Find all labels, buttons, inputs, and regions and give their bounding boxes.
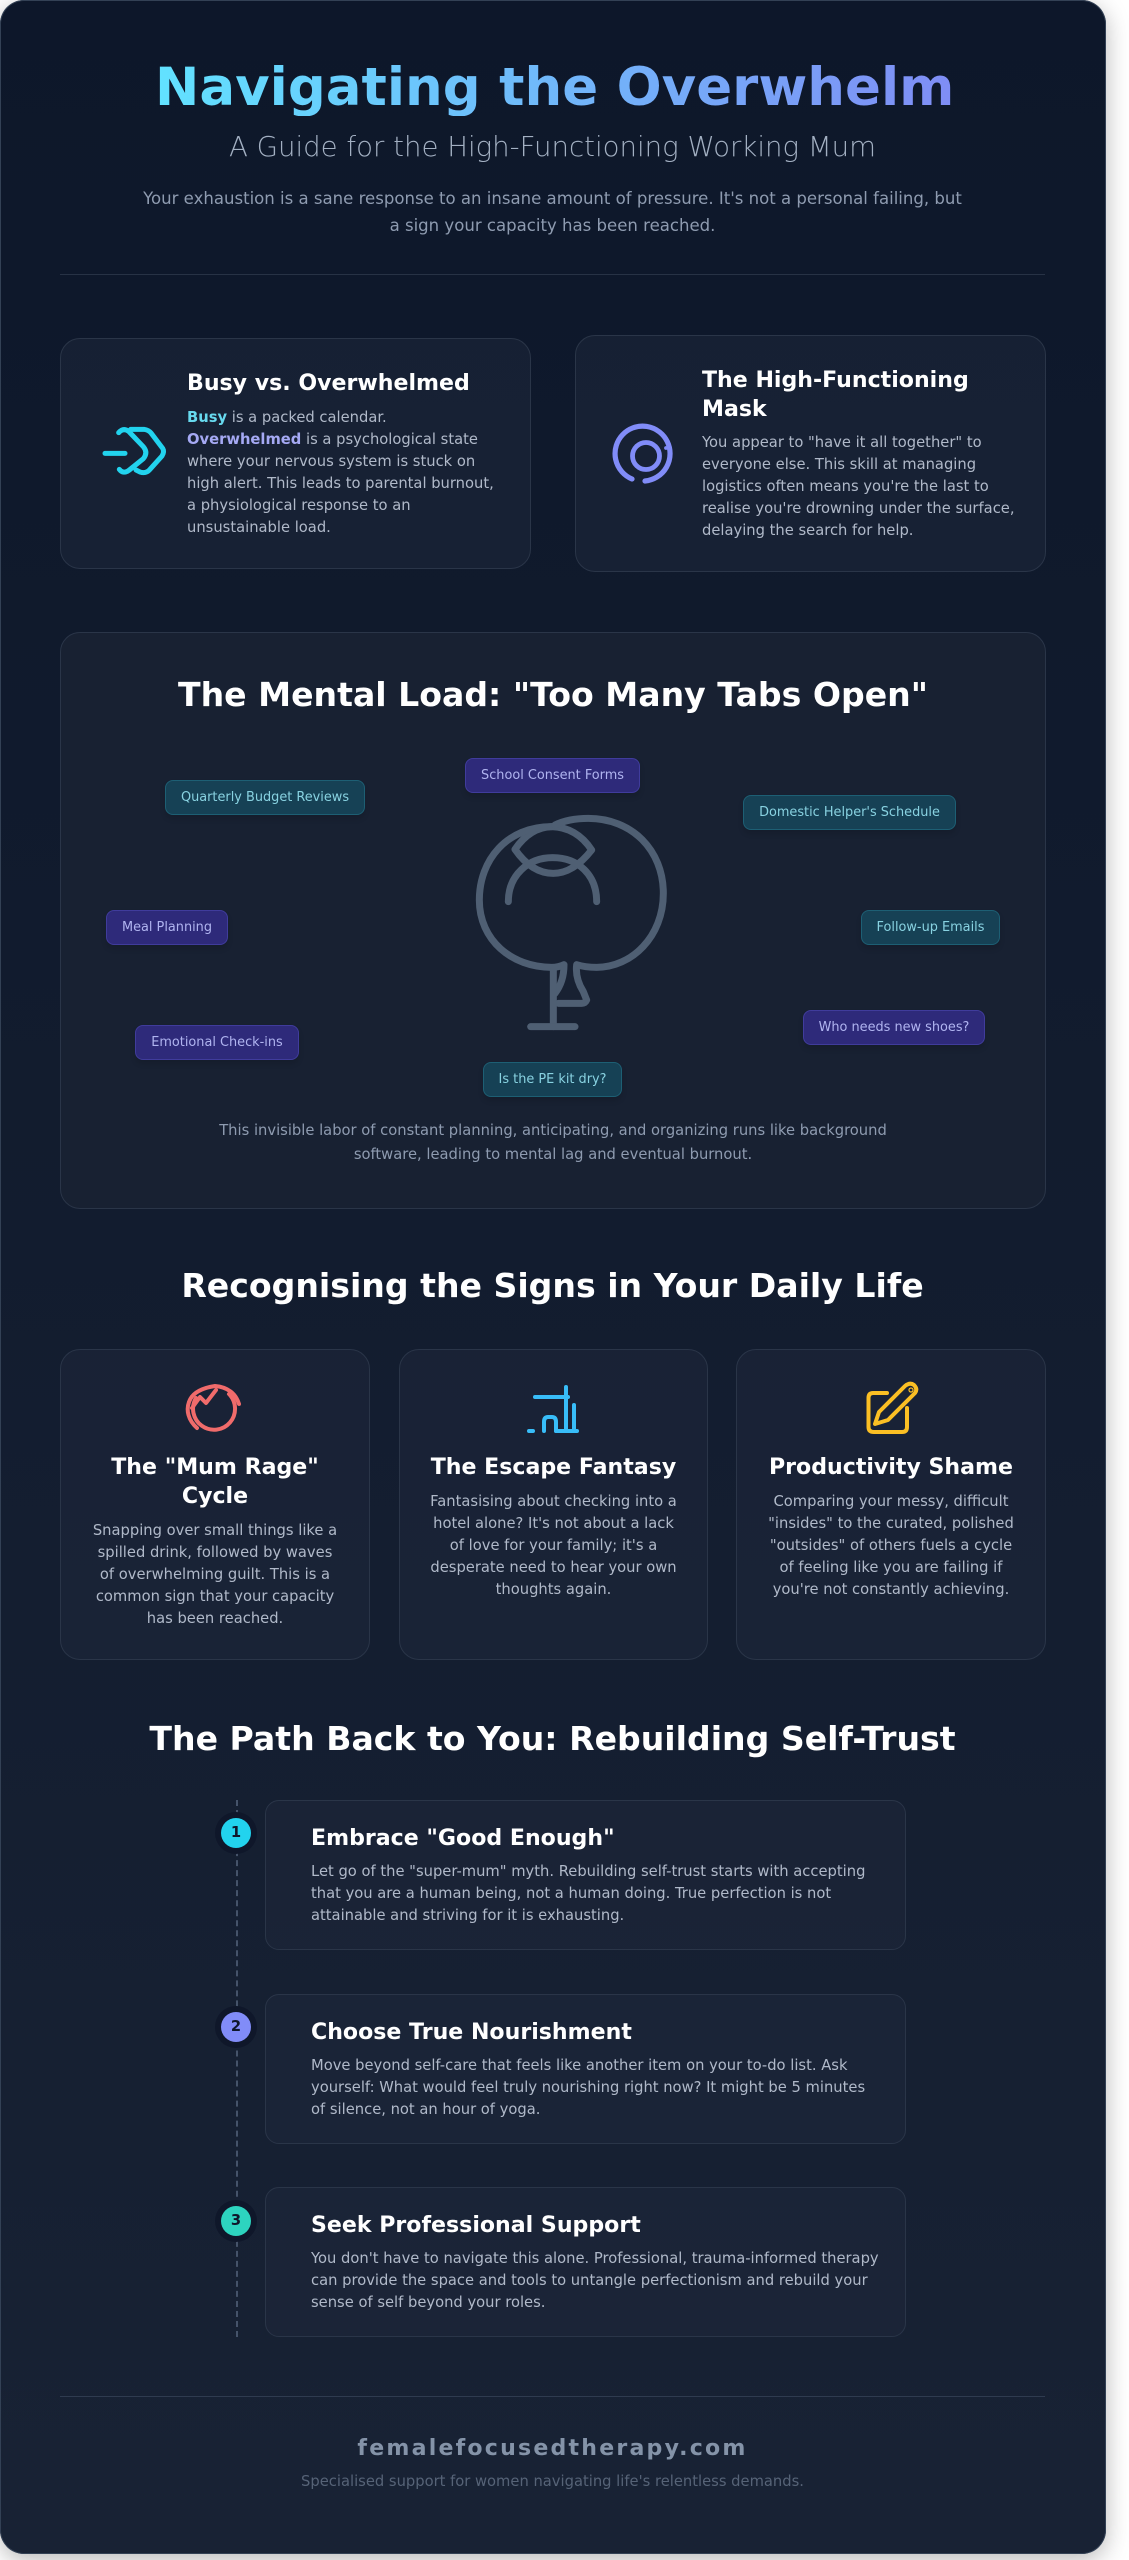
- body text: "outsides" of others fuels a cycle: [770, 1537, 1012, 1554]
- title: Navigating the Overwhelm: [155, 57, 954, 118]
- step 2 number: [221, 2012, 251, 2042]
- caption: This invisible labor of constant planning, anticipating, and organizing runs like background: [219, 1122, 887, 1139]
- body text: Fantasising about checking into a: [430, 1493, 677, 1510]
- step 2 card: [265, 1994, 906, 2144]
- body text: desperate need to hear your own: [430, 1559, 677, 1576]
- body text: [768, 1493, 1014, 1598]
- tag: School Consent Forms: [481, 768, 624, 783]
- icon: double chevron arrow: [102, 426, 166, 476]
- icon: head with brain: [476, 814, 667, 1030]
- step 2 body: of silence, not an hour of yoga.: [311, 2101, 540, 2118]
- heading: Busy vs. Overwhelmed: [187, 371, 470, 396]
- panel: productivity shame: [736, 1349, 1046, 1660]
- body text: You appear to "have it all together" to: [702, 434, 982, 451]
- icon: city skyline: [527, 1385, 579, 1433]
- step 3 heading: Seek Professional Support: [311, 2213, 641, 2238]
- body text: of feeling like you are failing if: [780, 1559, 1002, 1576]
- step 2 number: 2: [231, 2018, 241, 2035]
- tag: Quarterly Budget Reviews: [181, 790, 349, 805]
- tag: Who needs new shoes?: [819, 1020, 969, 1035]
- tag: Meal Planning: [122, 920, 212, 935]
- tag: [803, 1010, 985, 1045]
- intro text: Your exhaustion is a sane response to an insane amount of pressure. It's not a personal failing, but: [143, 189, 962, 208]
- step 2 heading: Choose True Nourishment: [311, 2020, 632, 2045]
- timeline line: [236, 1800, 238, 2337]
- step 1 body: [311, 1863, 865, 1924]
- heading: The Mental Load: "Too Many Tabs Open": [178, 675, 928, 714]
- body text: Comparing your messy, difficult: [774, 1493, 1008, 1510]
- step 1 body: Let go of the "super-mum" myth. Rebuilding self-trust starts with accepting: [311, 1863, 865, 1880]
- body text: [187, 409, 494, 536]
- body text: thoughts again.: [496, 1581, 611, 1598]
- step 2 body: yourself: What would feel truly nourishing right now? It might be 5 minutes: [311, 2079, 865, 2096]
- body text: has been reached.: [147, 1610, 283, 1627]
- body text: [430, 1493, 677, 1598]
- step 3 body: [311, 2250, 879, 2311]
- body text: unsustainable load.: [187, 519, 331, 536]
- body text: Snapping over small things like a: [93, 1522, 337, 1539]
- heading: [702, 368, 969, 422]
- body text: realise you're drowning under the surface,: [702, 500, 1015, 517]
- step 3 body: can provide the space and tools to untangle perfectionism and rebuild your: [311, 2272, 868, 2289]
- step 1 body: that you are a human being, not a human doing. True perfection is not: [311, 1885, 831, 1902]
- tag: [743, 795, 956, 830]
- panel: mental load: [60, 632, 1046, 1209]
- body text: everyone else. This skill at managing: [702, 456, 976, 473]
- heading: The "Mum Rage": [111, 1455, 319, 1480]
- heading: [111, 1455, 319, 1509]
- tag: [861, 910, 1000, 945]
- icon: pencil on square: [866, 1382, 918, 1434]
- tag: [165, 780, 365, 815]
- icon: mask rings: [612, 424, 673, 484]
- tag: [465, 758, 640, 793]
- body text: of overwhelming guilt. This is a: [100, 1566, 330, 1583]
- body text: Overwhelmed is a psychological state: [187, 431, 478, 448]
- tag: Follow-up Emails: [877, 920, 984, 935]
- body text: where your nervous system is stuck on: [187, 453, 475, 470]
- step 3 number: 3: [231, 2212, 241, 2229]
- step 1 heading: Embrace "Good Enough": [311, 1826, 615, 1851]
- intro text: [143, 189, 962, 234]
- step 1 card: [265, 1800, 906, 1950]
- body text: delaying the search for help.: [702, 522, 913, 539]
- heading: path back: The Path Back to You: Rebuilding Self-Trust: [149, 1719, 956, 1758]
- heading: The Escape Fantasy: [431, 1455, 676, 1480]
- panel: escape fantasy: [399, 1349, 708, 1660]
- step 1 number: [221, 1818, 251, 1848]
- heading: signs: Recognising the Signs in Your Daily Life: [181, 1266, 924, 1305]
- heading: Productivity Shame: [769, 1455, 1013, 1480]
- panel: high-functioning mask: [575, 335, 1046, 572]
- body text: spilled drink, followed by waves: [98, 1544, 332, 1561]
- step 3 body: You don't have to navigate this alone. Professional, trauma-informed therapy: [311, 2250, 879, 2267]
- caption: software, leading to mental lag and eventual burnout.: [354, 1146, 752, 1162]
- body text: logistics often means you're the last to: [702, 478, 989, 495]
- body text: high alert. This leads to parental burnout,: [187, 475, 494, 492]
- body text: [93, 1522, 337, 1627]
- panel: busy vs overwhelmed: [60, 338, 531, 569]
- body text: [702, 434, 1015, 539]
- body text: hotel alone? It's not about a lack: [433, 1515, 674, 1532]
- caption: [219, 1122, 887, 1162]
- tag: [135, 1025, 299, 1060]
- step 1 body: attainable and striving for it is exhausting.: [311, 1907, 624, 1924]
- footer tagline: Specialised support for women navigating life's relentless demands.: [301, 2473, 804, 2490]
- body text: of love for your family; it's a: [450, 1537, 657, 1554]
- heading: Mask: [702, 397, 767, 422]
- subtitle: A Guide for the High-Functioning Working Mum: [229, 130, 876, 163]
- icon: rage gauge: [186, 1384, 242, 1432]
- tag: Domestic Helper's Schedule: [759, 805, 940, 820]
- step 3 body: sense of self beyond your roles.: [311, 2294, 545, 2311]
- body text: Busy is a packed calendar.: [187, 409, 387, 426]
- tag: [106, 910, 228, 945]
- footer website: femalefocusedtherapy.com: [357, 2436, 748, 2461]
- body text: common sign that your capacity: [96, 1588, 334, 1605]
- tag: Is the PE kit dry?: [499, 1072, 606, 1087]
- tag: Emotional Check-ins: [151, 1035, 283, 1050]
- body text: a physiological response to an: [187, 497, 411, 514]
- step 2 body: Move beyond self-care that feels like another item on your to-do list. Ask: [311, 2057, 847, 2074]
- step 3 card: [265, 2187, 906, 2337]
- intro text: a sign your capacity has been reached.: [390, 216, 715, 234]
- step 1 number: 1: [231, 1824, 241, 1841]
- step 3 number: [221, 2206, 251, 2236]
- panel: mum rage: [60, 1349, 370, 1660]
- tag: [483, 1062, 622, 1097]
- heading: Cycle: [182, 1484, 248, 1509]
- step 2 body: [311, 2057, 865, 2118]
- body text: you're not constantly achieving.: [773, 1581, 1009, 1598]
- heading: The High-Functioning: [702, 368, 969, 393]
- body text: "insides" to the curated, polished: [768, 1515, 1014, 1532]
